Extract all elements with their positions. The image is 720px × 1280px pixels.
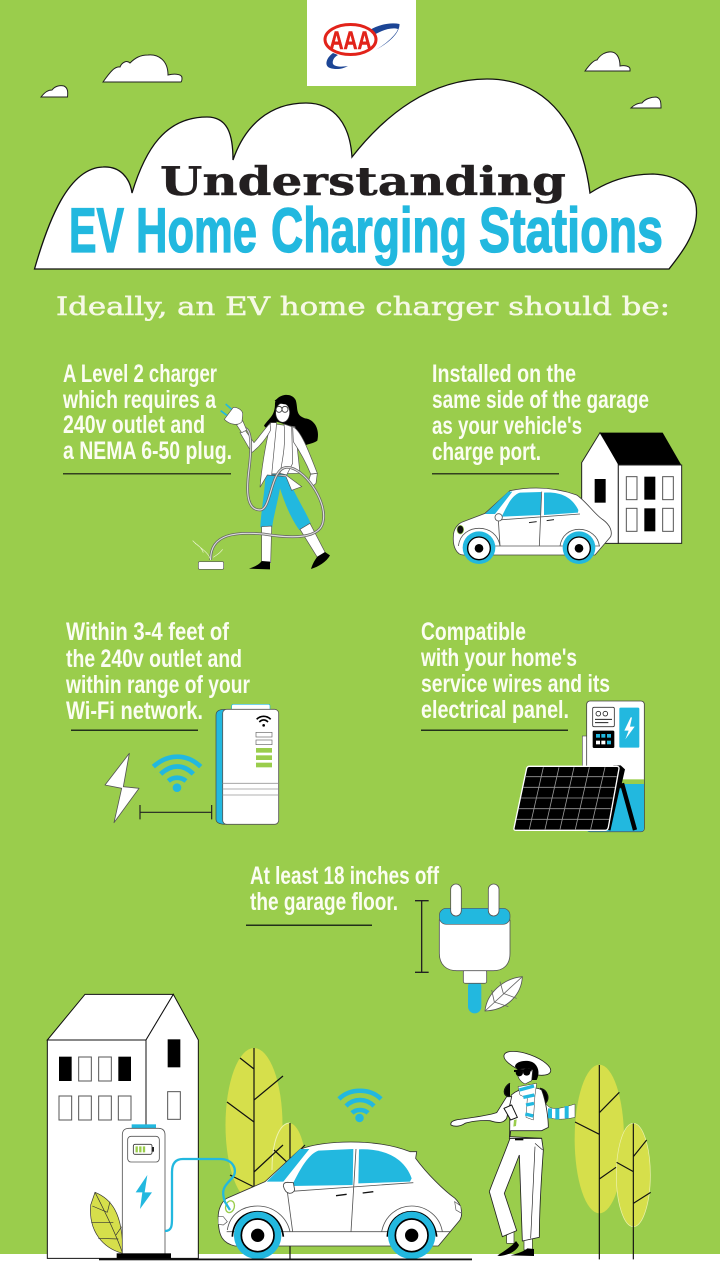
title: EV	[69, 196, 124, 266]
title: Home	[136, 196, 257, 266]
illustration: solar panel and power unit	[514, 701, 644, 832]
text block: compatibility: electrical panel.	[421, 696, 569, 724]
trees behind car	[226, 1048, 306, 1260]
icon: wifi	[153, 757, 201, 790]
trees	[575, 1065, 651, 1259]
illustration: woman holding plug	[193, 395, 330, 569]
charging cable	[165, 1159, 235, 1231]
illustration: wall charger with wifi	[105, 704, 279, 824]
leaf	[90, 1192, 123, 1253]
text block: outlet distance: Within 3-4 feet of	[66, 618, 230, 646]
title: Understanding	[160, 159, 566, 205]
head and hat	[501, 1046, 554, 1084]
icon: leaf	[485, 977, 522, 1011]
text block: garage side: same side of the garage	[432, 386, 649, 414]
icon: wifi over car	[339, 1091, 381, 1120]
illustration: house with car	[453, 433, 682, 564]
text block: garage side	[432, 360, 649, 474]
icon: lightning bolt	[105, 753, 139, 823]
text block: outlet distance	[65, 618, 250, 731]
charger unit	[216, 704, 279, 824]
text block: compatibility	[420, 618, 610, 731]
text block: compatibility: service wires and its	[421, 670, 610, 698]
logo: AAA: AAA	[330, 27, 372, 55]
illustration: building with charging station	[47, 994, 198, 1259]
text block: height off floor: the garage floor.	[250, 888, 398, 916]
text block: level 2 charger: a NEMA 6-50 plug.	[63, 437, 232, 465]
text block: height off floor: At least 18 inches off	[250, 862, 440, 890]
text block: level 2 charger: which requires a	[62, 386, 217, 414]
text block: outlet distance: within range of your	[65, 671, 250, 699]
illustration: woman with scarf	[451, 1046, 651, 1259]
measure line	[140, 805, 212, 819]
text block: compatibility: with your home's	[420, 644, 577, 672]
text block: level 2 charger	[62, 360, 232, 474]
subheading: Ideally, an EV home charger should be:	[56, 292, 670, 321]
scarf tail	[546, 1103, 575, 1119]
text block: garage side: charge port.	[432, 438, 541, 466]
text block: garage side: as your vehicle's	[432, 412, 582, 440]
text block: outlet distance: the 240v outlet and	[66, 645, 242, 673]
illustration: plug with height marker	[415, 884, 522, 1013]
arm	[451, 1097, 512, 1126]
text block: compatibility: Compatible	[421, 618, 526, 646]
small clouds	[41, 52, 661, 108]
text block: height off floor	[246, 862, 440, 926]
ground line	[99, 1258, 472, 1260]
title: Charging	[271, 196, 467, 266]
scarf	[518, 1083, 537, 1120]
text block: outlet distance: Wi-Fi network.	[66, 697, 203, 725]
charging station	[117, 1124, 171, 1259]
text block: level 2 charger: 240v outlet and	[63, 411, 205, 439]
illustration: electric car	[218, 1142, 462, 1259]
title	[69, 159, 663, 266]
logo: AAA	[307, 0, 416, 86]
title cloud	[34, 79, 697, 269]
text block: level 2 charger: A Level 2 charger	[63, 360, 217, 388]
text block: garage side: Installed on the	[432, 360, 576, 388]
measure line	[415, 901, 429, 972]
